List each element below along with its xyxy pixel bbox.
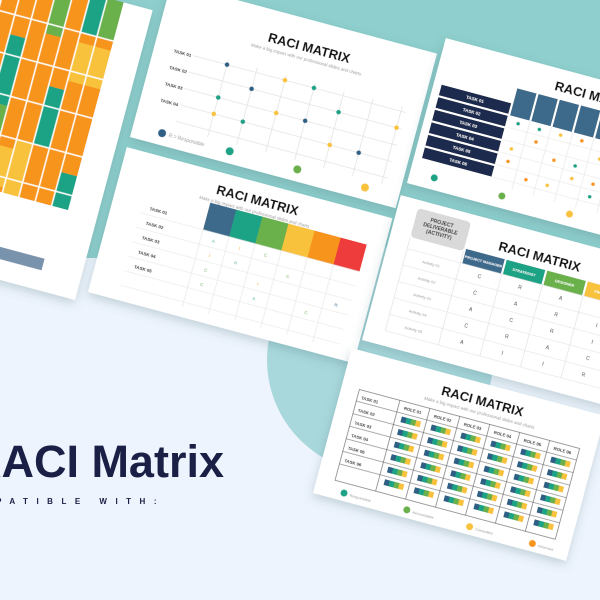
slide 5: deliverable table: R [517,285,523,292]
slide 6: badge table: ROLE 02 [433,414,453,423]
slide 3: tab matrix: TASK 06 [449,157,468,167]
slide 6: badge table: Informed [537,543,554,552]
slide 2: dot matrix: TASK 03 [164,81,184,91]
slide 5: deliverable table: A [459,340,465,346]
slide 4: colored header table: A [252,296,256,301]
slide 3: tab matrix: TASK 01 [466,95,485,104]
slide 4: colored header table: TASK 05 [134,264,153,274]
slide 5: deliverable table: R [504,334,510,341]
slide 5: deliverable table: Activity 01 [422,259,441,269]
slide 2: dot matrix: TASK 04 [160,98,179,107]
slide 6: badge table: TASK 05 [347,446,366,455]
slide 6: badge table: ROLE 01 [403,406,423,415]
slide 5: deliverable table: DELIVERABLE [422,222,459,237]
slide 6: badge table: Responsible [349,493,372,503]
slide 5: deliverable table: A [558,296,563,302]
slide 4: colored header table: TASK 02 [145,221,164,230]
slide 1: colored grid [0,0,153,300]
slide 2: dot matrix: Make a big impact with our professional slides and charts [250,42,363,77]
title slide 6: RACI MATRIX [440,383,525,419]
slide 6: badge table: ROLE 06 [553,446,572,456]
slide 4: colored header table: A [211,238,216,244]
slide 4: colored header table: I [208,253,211,258]
slide 5: deliverable table: R [549,328,554,335]
slide 3: tab matrix: TASK 02 [462,107,482,117]
slide 5: deliverable table: PROJECT [430,218,454,230]
slide 2: dot matrix: R = Responsible [168,133,205,148]
slide 4: colored header table: Make a big impact with our professional slides and charts [199,195,311,229]
slide 3: tab matrix: TASK 05 [452,145,472,154]
slide 5: deliverable table: I [591,340,594,346]
slide 4: colored header table: C [304,310,309,316]
slide 4: colored header table: TASK 01 [149,206,168,216]
slide 3: tab matrix: TASK 03 [459,120,478,129]
slide 6: badge table: TASK 01 [361,395,379,405]
slide 5: deliverable table: STRATEGIST [512,268,537,278]
slide 6: badge table: TASK 02 [357,408,376,417]
slide 3: tab matrix: TASK 04 [456,132,475,142]
slide 5: deliverable table: Activity 05 [404,325,424,334]
slide 4: colored header table: C [286,274,291,280]
slide 5: deliverable table: C [472,290,478,297]
slide 4: colored header table: C [203,267,209,273]
slide 4: colored header table: C [200,282,205,288]
slide 5: deliverable table: A [468,307,473,314]
slide 4: colored header table: A [234,260,238,266]
slide 6: badge table: ROLE 03 [463,422,483,431]
slide 5: deliverable table: R [553,312,559,319]
slide 5: deliverable table: Activity 03 [413,292,432,302]
slide 4: colored header table: I [257,282,259,287]
slide 5: deliverable table: A [513,301,518,308]
slide 5: deliverable table: R [581,372,586,379]
slide 4: colored header table: R [334,302,339,308]
slide 6: badge table: Accountable [412,509,435,520]
slide 5: deliverable table [362,195,600,407]
slide 5: deliverable table: C [477,274,482,281]
slide 6: badge table: TASK 04 [351,433,369,442]
slide 4: colored header table: TASK 03 [141,235,161,245]
slide 5: deliverable table: C [508,318,514,324]
slide 6: badge table: ROLE 04 [493,430,512,439]
slide 5: deliverable table: I [595,323,598,329]
title slide 2: RACI MATRIX [267,30,352,66]
slide 6: badge table: TASK 03 [354,420,373,430]
slide 5: deliverable table: C [585,356,591,363]
slide 6: badge table: ROLE 05 [523,438,542,447]
slide 5: deliverable table: I [501,351,504,357]
slide 6: badge table [313,348,600,561]
slide 5: deliverable table: DESIGNER [554,279,575,288]
slide 5: deliverable table: I [541,362,544,368]
slide 6: badge table: Make a big impact with our professional slides and charts [424,396,536,430]
slide 4: colored header table: TASK 04 [137,250,157,259]
title slide 5: RACI MATRIX [497,238,583,275]
slide 5: deliverable table: (ACTIVITY) [425,229,452,242]
slide 2: dot matrix [130,0,437,208]
slide 4: colored header table [88,147,392,363]
slide 5: deliverable table: PROJECT MANAGER [464,255,503,269]
slide 6: badge table: Consulted [475,526,493,536]
slide 5: deliverable table: Activity 02 [417,275,437,285]
slide 3: tab matrix [407,38,600,250]
slide 5: deliverable table: A [545,345,550,352]
slide 2: dot matrix: TASK 01 [173,48,192,58]
slide 6: badge table: TASK 06 [344,458,362,468]
slide 4: colored header table: C [263,252,269,258]
slide 5: deliverable table: Activity 04 [408,308,428,318]
slide 4: colored header table: I [238,246,241,251]
slide 2: dot matrix: TASK 02 [169,65,188,75]
slide 5: deliverable table: C [464,323,469,330]
title slide 4: RACI MATRIX [215,182,300,218]
